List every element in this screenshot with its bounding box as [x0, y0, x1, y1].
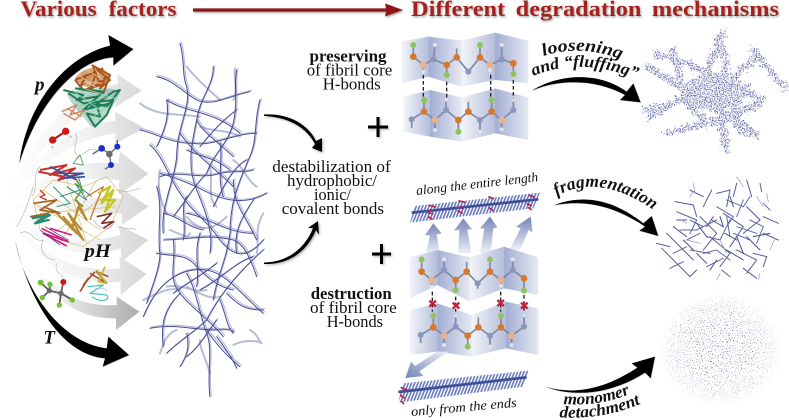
text: destruction: of fibril core [310, 298, 397, 317]
monomer cloud [659, 293, 782, 407]
text: destruction: H-bonds [327, 312, 383, 331]
pale down arrow [405, 352, 448, 378]
text: preserving: preserving [310, 46, 387, 66]
molecule: guanidinium [93, 140, 120, 169]
protein: small bottom [80, 267, 108, 300]
arrow: network to destabilization (top) [264, 114, 322, 152]
broken H-bonds [429, 292, 528, 312]
label guide paths [533, 51, 656, 418]
atoms lower chain [409, 97, 516, 135]
protein: central complex [17, 133, 140, 280]
text: monomer: monomer [564, 386, 628, 404]
fragments cloud [657, 177, 778, 280]
arrow: network to destabilization (bottom) [264, 221, 319, 264]
arrow: fragmentation [553, 199, 658, 236]
text: preserving: of fibril core [307, 60, 392, 80]
fibril: along the length [410, 193, 540, 223]
molecule: hydrogen peroxide [49, 128, 72, 148]
label: T: T [43, 327, 56, 348]
text: destabilization [272, 157, 391, 218]
text: destruction: destruction [311, 284, 392, 303]
text: preserving: H-bonds [323, 74, 381, 94]
text: destruction [310, 284, 397, 331]
black arrow: pressure [19, 35, 133, 163]
atoms upper chain [418, 256, 527, 294]
protein: top enzyme [62, 65, 120, 127]
panel: preserved H-bond sheet [402, 33, 528, 142]
text: loosening: loosening [542, 41, 623, 61]
icon: plus top [368, 117, 388, 137]
grey arrows fan [3, 74, 148, 330]
atoms upper chain [410, 42, 517, 79]
hydrogen bonds [423, 75, 513, 100]
text: fragmentation: fragmentation [554, 178, 656, 210]
text: destabilization: destabilization of [272, 157, 391, 176]
panel: factors fan [3, 35, 148, 367]
pleated sheets [402, 33, 528, 142]
panel: degradation outcomes [532, 28, 788, 418]
arrow: factors to mechanisms [193, 4, 403, 16]
arrow: monomer detachment [545, 357, 655, 393]
pleated sheets [410, 247, 538, 357]
fluffed fibril cloud [647, 33, 785, 152]
text: only from the ends: only from the ends [410, 395, 517, 419]
text: along the entire length: along the entire length [415, 169, 539, 198]
fibril: from the ends [398, 371, 528, 404]
dark fibrils [140, 43, 267, 397]
arrow: loosening [532, 77, 641, 102]
icon: plus bottom [372, 244, 391, 264]
panel: destroyed H-bond sheet [398, 169, 540, 419]
text: preserving [307, 46, 392, 94]
black arrow: temperature [15, 240, 129, 367]
twisted fibril shadow strands [141, 42, 268, 395]
molecule: halogenated alcohol [38, 279, 75, 308]
pale fibrils [140, 67, 263, 373]
text: destabilization: ionic/ [314, 185, 351, 204]
chart: fibril network [140, 42, 268, 397]
atoms lower chain [418, 313, 527, 350]
pale up arrows [425, 216, 533, 253]
text: destabilization: covalent bonds [282, 199, 384, 218]
text: and fluffing: and “fluffing” [532, 55, 640, 78]
label: pH: pH [83, 241, 112, 262]
label: p: p [33, 75, 44, 96]
text: destabilization: hydrophobic/ [287, 171, 377, 190]
